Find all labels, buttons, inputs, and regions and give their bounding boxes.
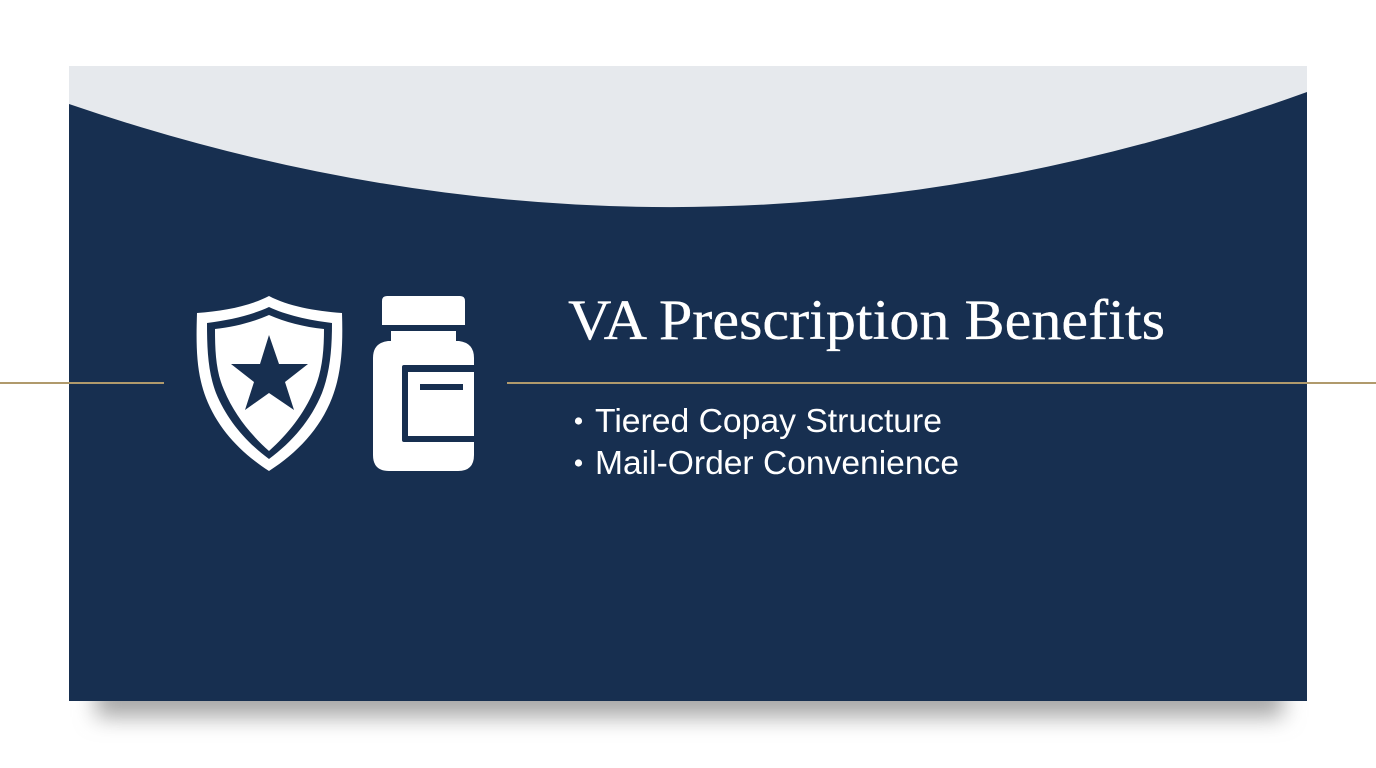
icon: shield with star <box>197 296 342 471</box>
gold divider right <box>507 382 1376 384</box>
curved light header band <box>69 66 1307 207</box>
panel: navy card <box>69 66 1307 701</box>
gold divider left <box>0 382 164 384</box>
bullet list <box>575 402 959 481</box>
bullet: mail-order: Mail-Order Convenience <box>595 444 959 481</box>
icon: prescription bottle <box>373 296 474 471</box>
title: VA Prescription Benefits <box>568 289 1165 352</box>
panel drop shadow <box>96 670 1283 717</box>
bullet: tiered copay: Tiered Copay Structure <box>595 402 942 439</box>
